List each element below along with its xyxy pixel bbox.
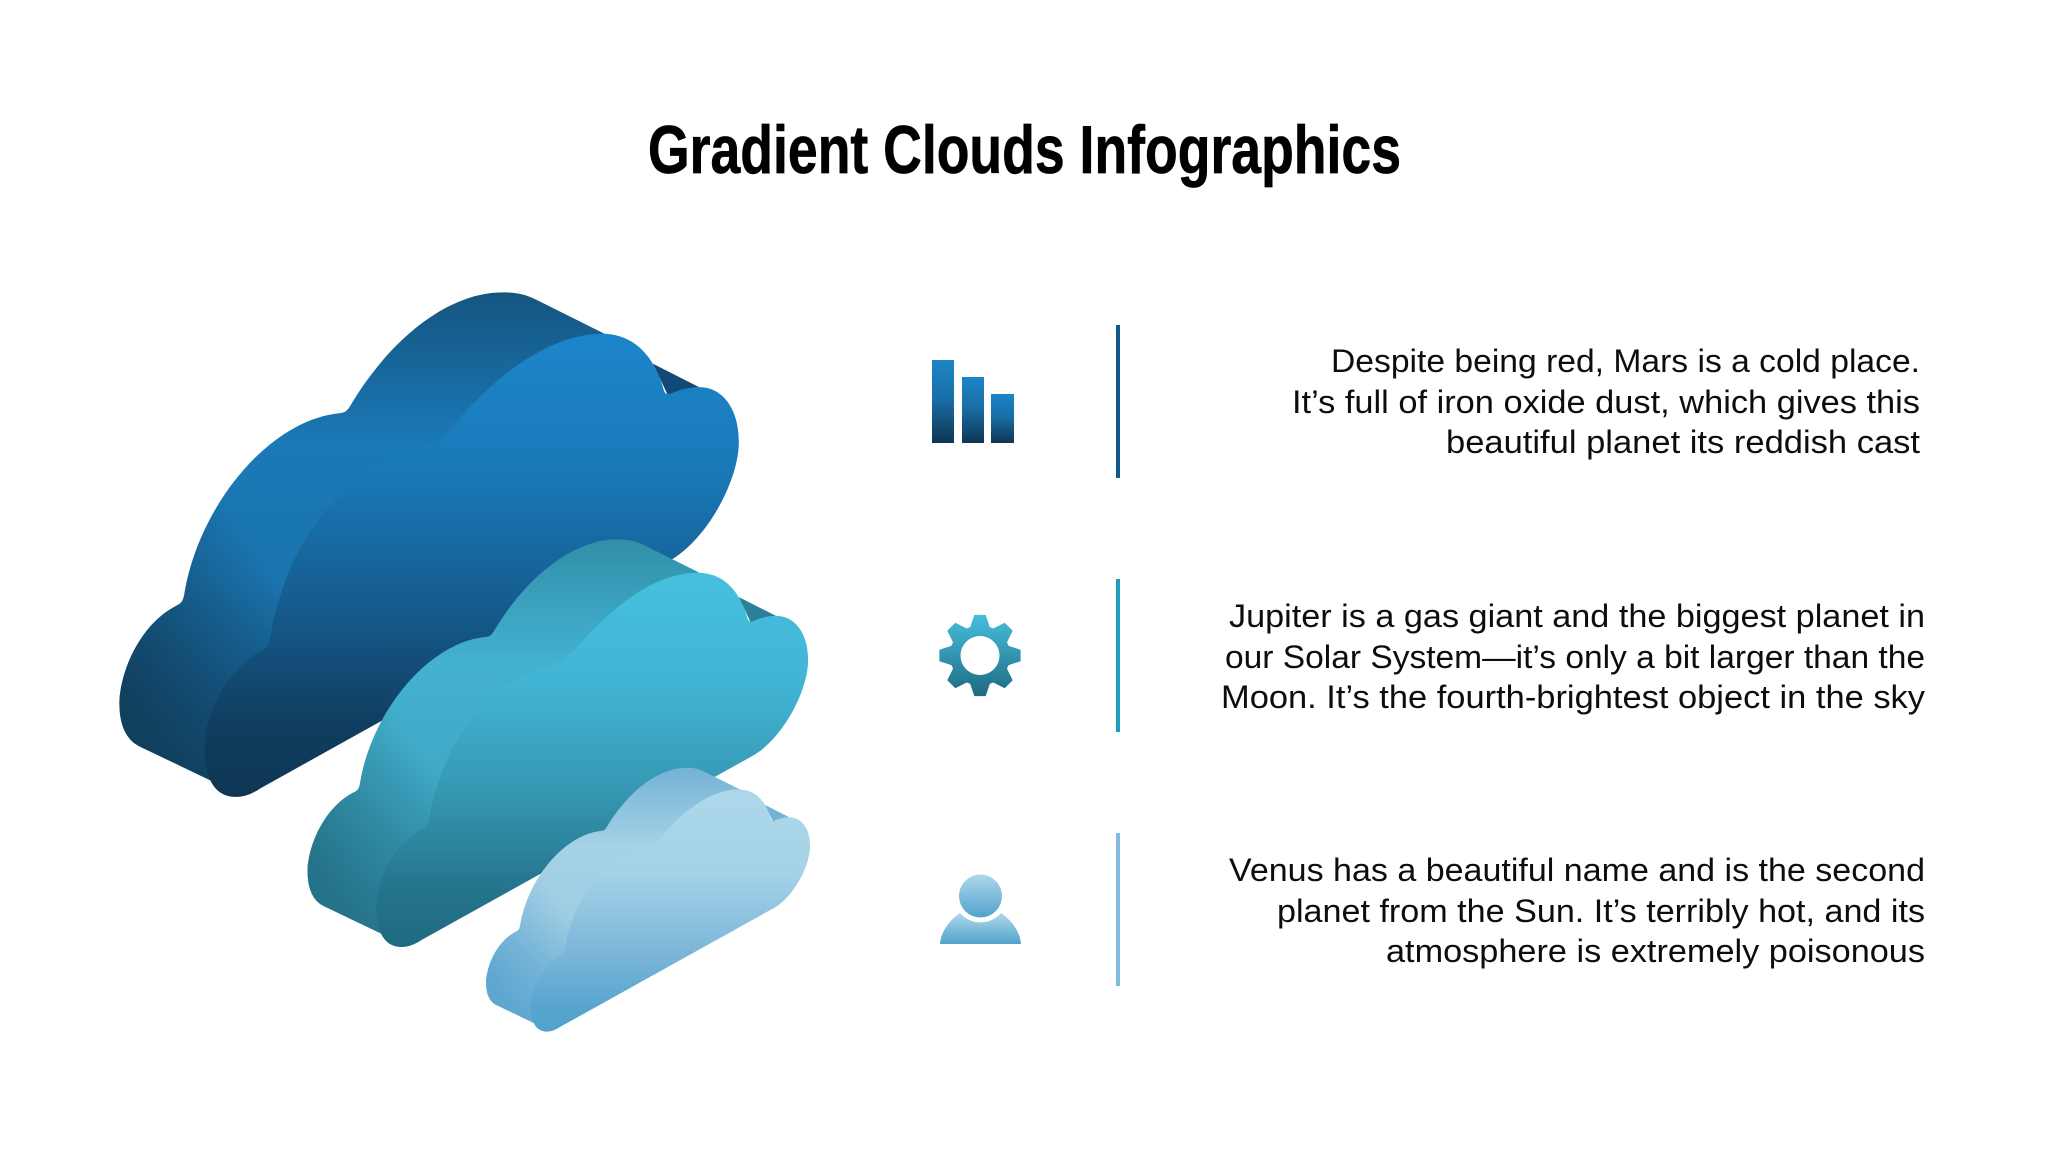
text block: Venus: planet from the Sun. It’s terribly hot, and its: [1277, 893, 1925, 929]
icon: bar chart: [932, 360, 1014, 443]
cloud: medium teal: [308, 539, 808, 947]
divider: light blue: [1116, 833, 1120, 986]
text block: Mars: [1292, 343, 1920, 460]
cloud: large dark blue: [119, 292, 739, 797]
text block: Mars: It’s full of iron oxide dust, which gives this: [1292, 384, 1920, 420]
text block: Jupiter: our Solar System—it’s only a bit larger than the: [1225, 639, 1925, 675]
row 3: person icon, divider and text: [940, 833, 1925, 986]
row 2: gear icon, divider and text: [939, 579, 1925, 732]
text block: Venus: Venus has a beautiful name and is the second: [1229, 852, 1925, 888]
text block: Jupiter: [1221, 598, 1925, 715]
illustration: three isometric gradient clouds: [119, 292, 810, 1032]
divider: dark blue: [1116, 325, 1120, 478]
text block: Jupiter: Jupiter is a gas giant and the biggest planet in: [1229, 598, 1925, 634]
row 1: bar chart icon, divider and text: [932, 325, 1920, 478]
cloud: small light blue: [486, 768, 810, 1032]
text block: Venus: [1229, 852, 1925, 969]
text block: Venus: atmosphere is extremely poisonous: [1386, 933, 1925, 969]
icon: person: [940, 874, 1021, 944]
text block: Mars: Despite being red, Mars is a cold place.: [1331, 343, 1920, 379]
icon: gear: [939, 615, 1021, 696]
divider: teal: [1116, 579, 1120, 732]
title: Gradient Clouds Infographics: [648, 112, 1401, 188]
text block: Mars: beautiful planet its reddish cast: [1446, 424, 1920, 460]
text block: Jupiter: Moon. It’s the fourth-brightest object in the sky: [1221, 679, 1925, 715]
